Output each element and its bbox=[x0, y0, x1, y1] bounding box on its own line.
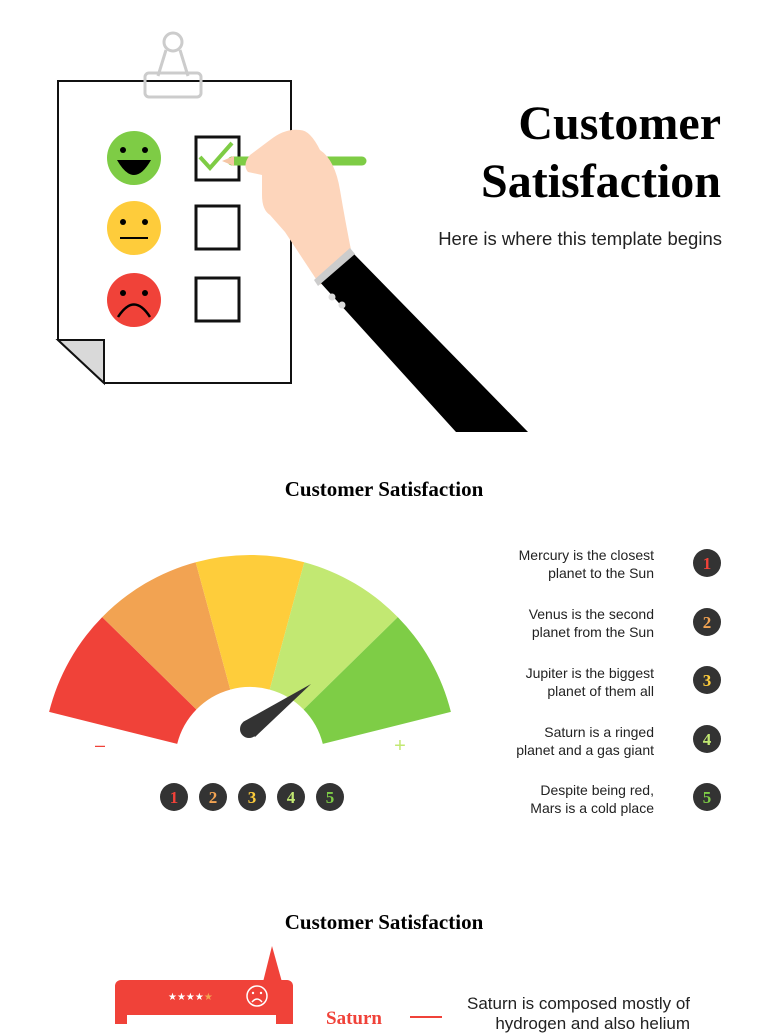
connector line bbox=[410, 1016, 442, 1018]
section heading 3: Customer Satisfaction bbox=[285, 910, 483, 934]
legend list: Mars is a cold place bbox=[530, 800, 654, 816]
legend list: planet to the Sun bbox=[548, 565, 654, 581]
sleeve bbox=[314, 248, 528, 432]
legend list: Saturn is a ringed bbox=[544, 724, 654, 740]
legend list: planet of them all bbox=[547, 683, 654, 699]
paper sheet bbox=[58, 81, 291, 383]
number badges: 5 bbox=[326, 788, 334, 807]
Saturn description bbox=[467, 994, 690, 1033]
Saturn description: Saturn is composed mostly of bbox=[467, 994, 690, 1013]
review card bbox=[115, 946, 293, 1024]
legend list bbox=[516, 547, 721, 816]
title: Customer bbox=[518, 97, 721, 150]
legend list: planet and a gas giant bbox=[516, 742, 654, 758]
gauge chart bbox=[49, 555, 451, 811]
minus/plus labels: – bbox=[95, 735, 105, 755]
Saturn label: Saturn bbox=[326, 1008, 382, 1029]
needle bbox=[240, 684, 311, 738]
title bbox=[481, 97, 721, 208]
number badges: 4 bbox=[287, 788, 296, 807]
illustration: clipboard with hand bbox=[56, 32, 528, 432]
icon: happy face bbox=[107, 131, 161, 185]
icon: check mark bbox=[200, 143, 232, 168]
hand bbox=[245, 130, 352, 285]
legend list: Despite being red, bbox=[540, 782, 654, 798]
Saturn description: hydrogen and also helium bbox=[495, 1014, 690, 1033]
legend list: planet from the Sun bbox=[532, 624, 654, 640]
legend list: Venus is the second bbox=[529, 606, 654, 622]
number badges bbox=[160, 783, 344, 811]
title: Satisfaction bbox=[481, 155, 721, 208]
pencil bbox=[222, 156, 362, 166]
legend list: 1 bbox=[703, 554, 711, 573]
legend list: Jupiter is the biggest bbox=[526, 665, 654, 681]
checkboxes bbox=[196, 137, 239, 321]
review card: ★★★★★ bbox=[168, 992, 213, 1003]
minus/plus labels: + bbox=[394, 735, 406, 757]
icon: neutral face bbox=[107, 201, 161, 255]
icon: sad face bbox=[107, 273, 161, 327]
number badges: 3 bbox=[248, 788, 256, 807]
section heading 2: Customer Satisfaction bbox=[285, 477, 483, 501]
icon: binder clip bbox=[145, 33, 201, 97]
legend list: 3 bbox=[703, 671, 711, 690]
legend list: 2 bbox=[703, 613, 711, 632]
legend list: Mercury is the closest bbox=[519, 547, 654, 563]
number badges: 2 bbox=[209, 788, 217, 807]
legend list: 5 bbox=[703, 788, 711, 807]
minus/plus labels bbox=[95, 735, 406, 757]
subtitle: Here is where this template begins bbox=[438, 228, 722, 249]
number badges: 1 bbox=[170, 788, 178, 807]
legend list: 4 bbox=[703, 730, 712, 749]
